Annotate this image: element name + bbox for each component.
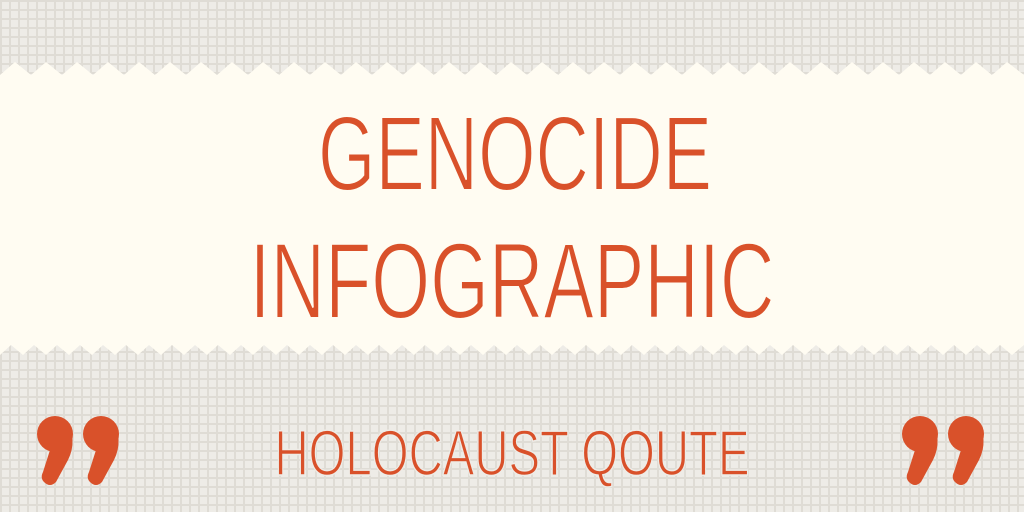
icon: right quote mark [902,416,984,485]
title line 1: GENOCIDE [318,95,712,213]
subtitle: HOLOCAUST QOUTE [274,417,750,489]
icon: left quote mark [37,416,119,485]
title line 2: INFOGRAPHIC [250,220,774,341]
panel: title banner [0,62,1024,355]
